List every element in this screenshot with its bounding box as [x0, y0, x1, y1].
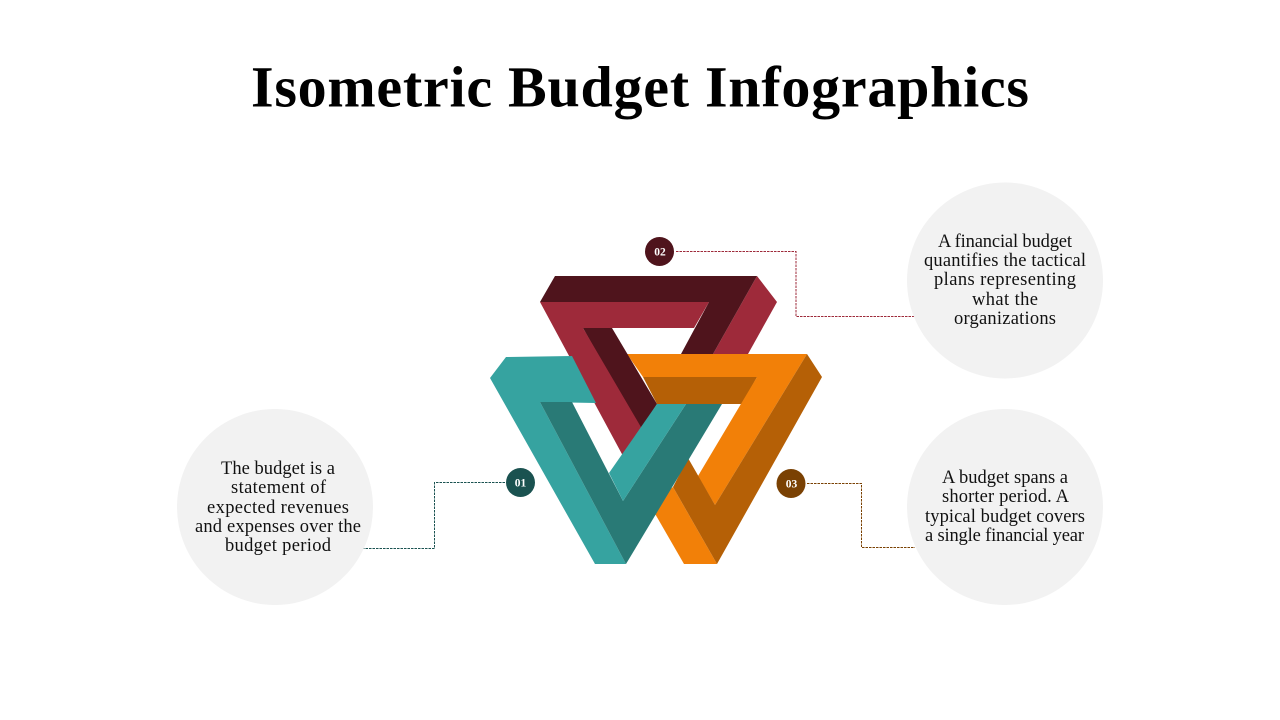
teal triangle	[490, 356, 722, 564]
orange triangle	[627, 354, 822, 564]
text block: budget period: typical budget covers	[925, 507, 1085, 527]
text block: budget statement: expected revenues	[207, 498, 349, 518]
text block: financial budget: quantifies the tactical	[924, 251, 1086, 271]
badge 02	[645, 237, 674, 266]
text block: budget period	[925, 468, 1085, 546]
text block: budget period: shorter period. A	[942, 487, 1070, 507]
text block: budget statement: and expenses over the	[195, 517, 361, 537]
badge 01	[506, 468, 535, 497]
text block: financial budget: plans representing	[934, 270, 1076, 290]
connector: 02	[676, 252, 915, 316]
badge 03: 03	[786, 478, 798, 490]
panel: financial budget	[907, 182, 1103, 378]
text block: budget period: A budget spans a	[942, 468, 1068, 488]
badge 03	[776, 469, 806, 498]
isometric triangle graphic	[490, 276, 822, 564]
title: Isometric Budget Infographics	[251, 54, 1029, 120]
text block: financial budget	[924, 232, 1086, 329]
connector: 03	[807, 484, 915, 548]
text block: budget statement: The budget is a	[221, 459, 335, 479]
badge 02: 02	[654, 246, 666, 258]
connector: 01	[363, 482, 505, 548]
badge 01: 01	[515, 478, 526, 490]
text block: financial budget: what the	[972, 290, 1038, 310]
red triangle	[540, 276, 777, 456]
text block: budget statement: budget period	[225, 536, 332, 556]
text block: financial budget: A financial budget	[938, 232, 1073, 252]
text block: budget period: a single financial year	[925, 526, 1084, 546]
text block: budget statement: statement of	[231, 478, 327, 498]
panel: budget statement	[177, 409, 373, 605]
text block: financial budget: organizations	[954, 309, 1056, 329]
text block: budget statement	[195, 459, 361, 556]
panel: budget period	[907, 409, 1103, 605]
